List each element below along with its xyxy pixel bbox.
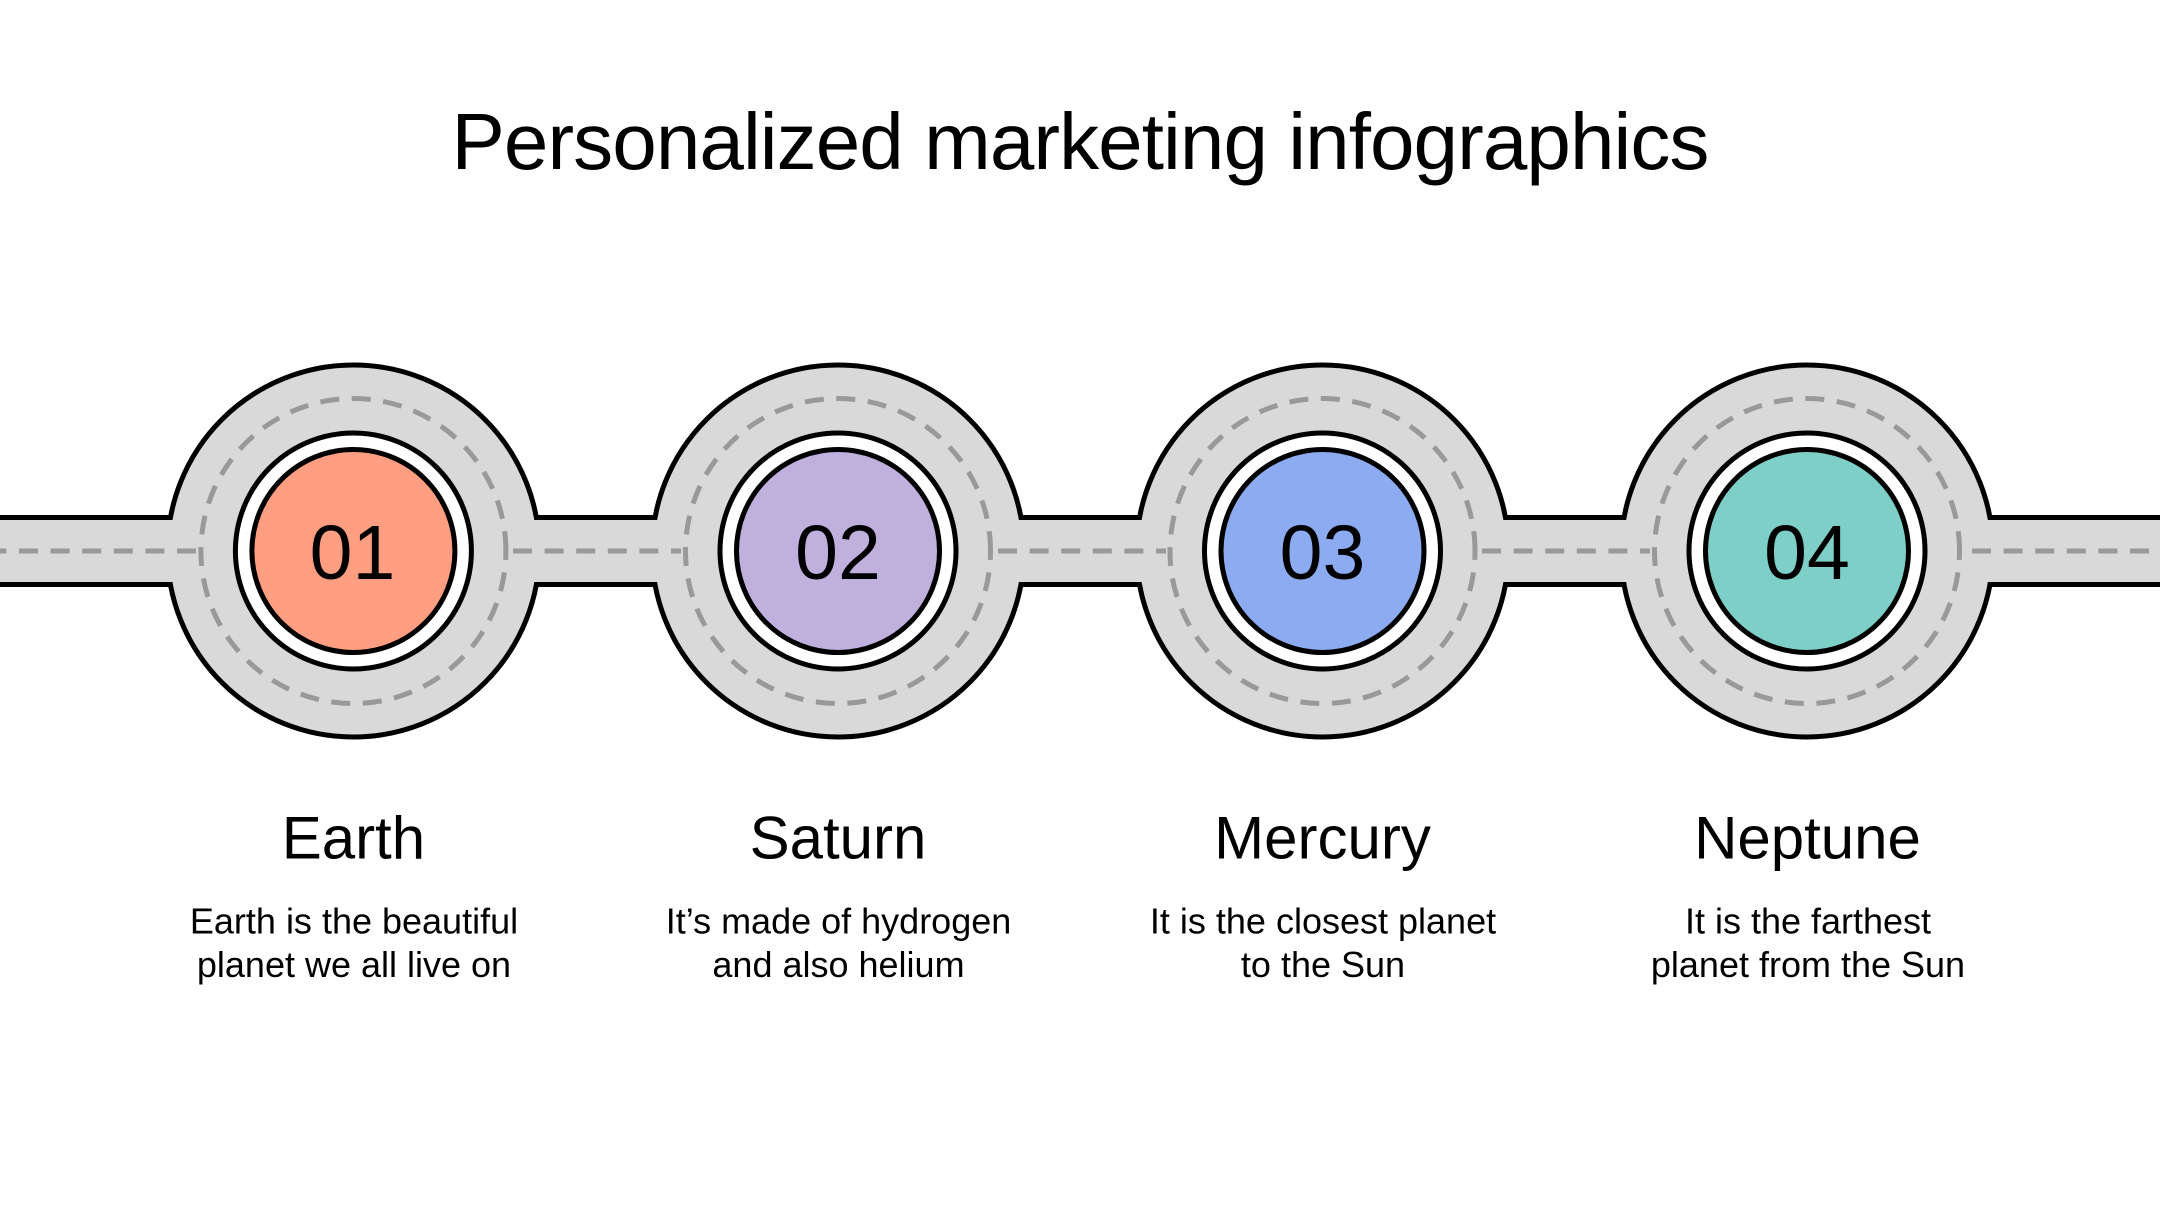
panel: Earth roundabout [160,365,547,737]
panel: Mercury roundabout [1129,365,1516,737]
text block: Earth description: planet we all live on [197,944,511,985]
text block: Saturn description: and also helium [712,944,965,985]
panel: Earth roundabout: 01 [310,510,395,596]
text block: Saturn description: It’s made of hydrogen [666,900,1011,942]
heading: Neptune: Neptune [1694,804,1921,872]
panel: Mercury roundabout: 03 [1280,510,1365,596]
text block: Neptune description: It is the farthest [1685,900,1931,942]
title: Personalized marketing infographics [451,97,1709,186]
panel: Neptune roundabout: 04 [1764,510,1850,596]
road: horizontal connector [0,518,2160,584]
text block: Earth description: Earth is the beautiful [190,900,518,942]
text block: Neptune description: planet from the Sun [1651,944,1965,985]
panel: Neptune roundabout [1613,365,2001,737]
heading: Earth: Earth [282,804,425,872]
road centre dashes [0,548,2160,554]
panel: Saturn roundabout [644,365,1032,737]
heading: Mercury: Mercury [1214,804,1431,872]
panel: Saturn roundabout: 02 [795,510,881,596]
text block: Mercury description: It is the closest planet [1150,900,1496,942]
text block: Mercury description: to the Sun [1241,944,1405,985]
heading: Saturn: Saturn [750,804,926,872]
